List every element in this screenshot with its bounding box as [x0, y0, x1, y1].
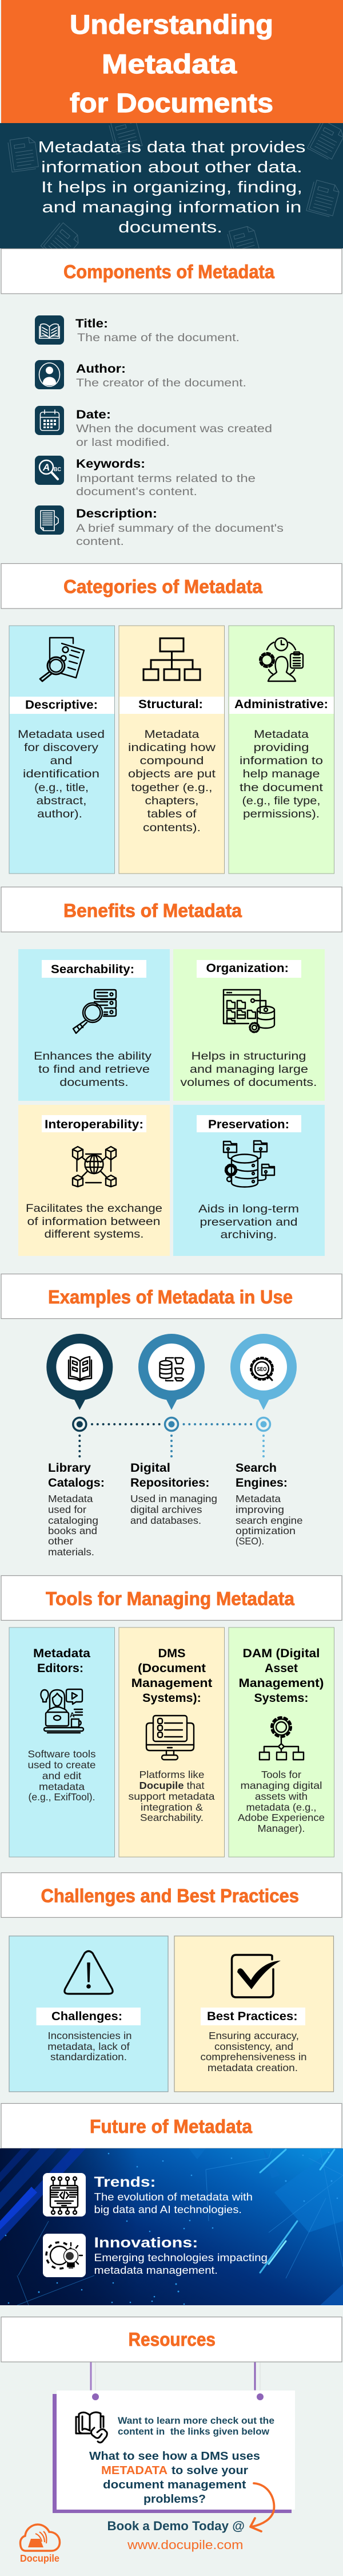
body text	[128, 728, 216, 834]
label	[197, 960, 301, 978]
text	[236, 1461, 303, 1547]
body text	[34, 1050, 151, 1089]
component: title: The name of the document.	[77, 331, 240, 344]
title banner: Understanding	[70, 9, 273, 39]
icon: network globe	[73, 1147, 116, 1187]
body text: (e.g., ExifTool).	[29, 1791, 95, 1803]
body text: Aids in long-term	[198, 1203, 299, 1215]
demo call to action: www.docupile.com	[127, 2538, 244, 2552]
body text: indicating how	[128, 741, 216, 754]
timeline node	[73, 1417, 160, 1457]
body text	[200, 2030, 306, 2073]
title banner: for Documents	[70, 88, 273, 118]
title banner	[1, 0, 343, 123]
call to action text: to solve your	[172, 2464, 248, 2477]
label: Interoperability:	[45, 1118, 143, 1131]
icon: hierarchy	[143, 638, 200, 680]
component: keywords: BC	[54, 467, 61, 473]
panel: resources card	[53, 2391, 295, 2513]
panel: future of metadata	[0, 2141, 343, 2305]
panel: structural	[119, 626, 224, 874]
panel: interoperability	[18, 1105, 170, 1256]
heading: categories of metadata: Categories of Metadata	[63, 576, 262, 598]
panel: descriptive	[9, 626, 114, 874]
body text: metadata creation.	[208, 2062, 298, 2073]
text	[130, 1461, 217, 1526]
body text	[27, 1748, 96, 1803]
body text: and edit	[42, 1770, 81, 1781]
body text: and managing large	[190, 1063, 308, 1076]
text: used for	[48, 1504, 86, 1515]
heading: challenges and best practices	[1, 1873, 342, 1918]
body text: Metadata	[144, 728, 200, 741]
body text: comprehensiveness in	[200, 2051, 306, 2063]
panel: administrative	[229, 626, 334, 874]
title: Systems:	[254, 1692, 309, 1705]
text: Repositories:	[130, 1476, 209, 1490]
body text: support metadata	[128, 1791, 215, 1802]
body text: of information between	[27, 1215, 160, 1228]
label	[42, 1115, 146, 1132]
text: materials.	[48, 1546, 94, 1558]
title: Management	[131, 1677, 212, 1690]
text: Search	[236, 1461, 277, 1475]
example: search engines	[230, 1334, 303, 1547]
component: title: Title:	[75, 317, 108, 330]
heading: components of metadata: Components of Metadata	[63, 262, 274, 283]
body text: Manager).	[257, 1823, 305, 1834]
heading: future of metadata	[1, 2103, 342, 2148]
title: Management)	[239, 1677, 324, 1690]
label band	[119, 697, 224, 714]
component: author: The creator of the document.	[76, 377, 246, 389]
technology background	[0, 2141, 343, 2305]
component: description: content.	[76, 535, 124, 548]
body text: Facilitates the exchange	[26, 1202, 162, 1215]
body text: identification	[23, 768, 99, 780]
panel: components list	[35, 315, 284, 548]
body text: volumes of documents.	[181, 1076, 317, 1089]
body text: the document	[240, 781, 324, 794]
body text: consistency, and	[214, 2041, 293, 2052]
component: title	[35, 315, 240, 345]
icon: gear hierarchy	[260, 1717, 304, 1760]
heading: tools for managing metadata	[1, 1575, 342, 1620]
body text: providing	[254, 741, 309, 754]
body text: tables of	[147, 808, 197, 820]
body text: Inconsistencies in	[48, 2030, 131, 2041]
body text: standardization.	[50, 2051, 127, 2063]
text: search engine	[236, 1515, 303, 1526]
label band: Administrative:	[234, 698, 328, 711]
heading: resources	[1, 2317, 342, 2362]
icon: admin person	[260, 638, 303, 681]
body text	[240, 728, 324, 820]
timeline node	[257, 1417, 270, 1457]
trend: icon and text	[43, 2173, 253, 2217]
body text: abstract,	[37, 795, 87, 807]
text: Engines:	[236, 1476, 288, 1490]
body text: different systems.	[45, 1228, 144, 1240]
body text: managing digital	[240, 1780, 322, 1791]
call to action text: document management	[103, 2478, 246, 2491]
body text	[26, 1202, 162, 1240]
component: keywords: document's content.	[76, 485, 197, 498]
body text: Metadata used	[18, 728, 105, 741]
text: and databases.	[130, 1515, 201, 1526]
arrow to demo link	[250, 2483, 274, 2531]
label: Best Practices:	[207, 2010, 297, 2023]
body text: Metadata	[254, 728, 309, 741]
example: library catalogs	[46, 1334, 160, 1558]
trend: icon and text: Trends:	[94, 2174, 155, 2190]
text: other	[48, 1535, 73, 1547]
icon: monitor checklist	[146, 1716, 194, 1760]
label band	[229, 697, 334, 714]
call to action text: What to see how a DMS uses	[89, 2449, 260, 2463]
body text: Adobe Experience	[238, 1812, 325, 1823]
timeline node	[165, 1417, 252, 1457]
text: optimization	[236, 1525, 296, 1536]
body text: documents.	[59, 1076, 129, 1089]
panel: best practices	[174, 1936, 334, 2092]
label: Preservation:	[208, 1118, 289, 1131]
body text: information to	[240, 754, 323, 767]
text: Metadata	[48, 1493, 93, 1504]
resource intro text: content in the links given below	[118, 2427, 269, 2437]
title: (Document	[138, 1662, 206, 1675]
title: DMS	[158, 1647, 185, 1660]
resource intro text	[118, 2416, 274, 2437]
call to action text: METADATA	[101, 2464, 167, 2477]
body text: metadata (e.g.,	[246, 1801, 317, 1813]
body text: objects are put	[128, 768, 216, 780]
panel: metadata editors	[9, 1627, 114, 1857]
title: Asset	[265, 1662, 298, 1675]
label: Organization:	[206, 962, 289, 975]
body text: Docupile that	[139, 1780, 205, 1791]
heading: resources: Resources	[128, 2329, 216, 2350]
intro panel	[0, 123, 343, 248]
example: digital repositories	[130, 1334, 252, 1526]
panel: searchability	[18, 949, 170, 1101]
demo call to action: Book a Demo Today @	[107, 2519, 245, 2533]
body text: integration &	[141, 1801, 203, 1813]
title: Editors:	[37, 1662, 83, 1675]
pin marker with book icon	[46, 1334, 113, 1410]
logo: docupile	[20, 2524, 59, 2564]
body text	[18, 728, 105, 820]
body text: (e.g., file type,	[242, 795, 320, 807]
text: Digital	[130, 1461, 170, 1475]
component: author	[35, 360, 246, 389]
demo call to action	[107, 2519, 245, 2552]
icon: document search	[40, 638, 84, 681]
body text: Ensuring accuracy,	[209, 2030, 299, 2041]
intro panel: documents.	[118, 218, 222, 236]
component: date: When the document was created	[76, 422, 272, 435]
body text: preservation and	[200, 1216, 297, 1228]
component: date: Date:	[76, 408, 111, 421]
heading: examples of metadata in use	[1, 1274, 342, 1319]
intro panel: and managing information in	[42, 198, 302, 216]
body text: permissions).	[243, 808, 320, 820]
text: books and	[48, 1525, 97, 1536]
label	[201, 2008, 305, 2025]
trend: icon and text: big data and AI technologies.	[94, 2203, 242, 2215]
body text: contents).	[143, 821, 201, 834]
innovation: icon and text	[43, 2234, 268, 2277]
call to action text	[89, 2449, 260, 2506]
body text: Tools for	[261, 1769, 301, 1780]
component: description	[35, 505, 284, 548]
innovation: icon and text: Innovations:	[94, 2235, 198, 2251]
heading: benefits of metadata	[1, 887, 342, 932]
icon: database archive	[224, 1141, 274, 1187]
panel: metadata editors: A	[70, 1711, 75, 1719]
component: author: Author:	[76, 362, 126, 376]
body text: chapters,	[145, 795, 199, 807]
body text: metadata	[39, 1781, 85, 1792]
card shadow frame	[53, 2394, 292, 2513]
title	[33, 1647, 90, 1675]
component: description: A brief summary of the document's	[76, 522, 284, 535]
body text	[198, 1203, 299, 1241]
panel: organization	[173, 949, 325, 1101]
text: cataloging	[48, 1515, 98, 1526]
component: date: or last modified.	[76, 436, 170, 449]
innovation: icon and text: Emerging technologies impacting	[94, 2251, 268, 2263]
body text: together (e.g.,	[131, 781, 213, 794]
heading: future of metadata: Future of Metadata	[90, 2116, 252, 2138]
text: improving	[236, 1504, 284, 1515]
icon: server search	[73, 990, 116, 1033]
text	[48, 1461, 105, 1558]
title: Metadata	[33, 1647, 90, 1660]
icon: book with link	[76, 2412, 107, 2443]
heading: tools for managing metadata: Tools for Managing Metadata	[46, 1589, 294, 1610]
icon: folder database	[224, 990, 274, 1032]
card pins	[92, 2393, 264, 2400]
call to action text: problems?	[143, 2492, 206, 2506]
heading: categories of metadata	[1, 563, 342, 609]
component: keywords: A	[42, 462, 50, 473]
body text: for discovery	[24, 741, 98, 754]
label band	[10, 697, 114, 714]
text: Library	[48, 1461, 91, 1475]
title: DAM (Digital	[242, 1647, 320, 1660]
body text: (e.g., title,	[34, 781, 89, 794]
component: date	[35, 406, 272, 449]
label: Challenges:	[51, 2010, 122, 2023]
panel: DMS	[119, 1627, 224, 1857]
body text: archiving.	[221, 1228, 277, 1241]
text: Metadata	[236, 1493, 281, 1504]
text: Used in managing	[130, 1493, 217, 1504]
intro panel: Metadata is data that provides	[38, 138, 305, 156]
component: description: Description:	[76, 507, 157, 520]
intro panel: information about other data.	[41, 158, 302, 176]
body text: Enhances the ability	[34, 1050, 151, 1062]
body text: metadata, lack of	[47, 2041, 130, 2052]
component: keywords: Important terms related to the	[76, 472, 256, 485]
label	[37, 2008, 141, 2025]
body text	[181, 1050, 317, 1089]
body text: Platforms like	[139, 1769, 205, 1780]
body text	[238, 1769, 325, 1834]
body text: assets with	[255, 1791, 308, 1802]
heading: challenges and best practices: Challenges and Best Practices	[41, 1886, 299, 1907]
body text: compound	[139, 754, 204, 767]
icon: warning triangle	[65, 1951, 113, 1994]
label	[197, 1115, 301, 1132]
body text	[128, 1769, 215, 1823]
body text: help manage	[242, 768, 320, 780]
pin marker with database icon	[138, 1334, 205, 1410]
heading: benefits of metadata: Benefits of Metadata	[63, 900, 242, 922]
body text	[47, 2030, 131, 2063]
pin marker with SEO icon: SEO	[257, 1366, 266, 1373]
title banner: Metadata	[102, 49, 237, 79]
body text: used to create	[27, 1759, 96, 1771]
label band: Structural:	[138, 698, 203, 711]
icon: checkbox	[232, 1955, 281, 1997]
innovation: icon and text: metadata management.	[94, 2264, 218, 2276]
title: Systems):	[142, 1692, 201, 1705]
trend: icon and text: The evolution of metadata with	[94, 2191, 253, 2203]
panel: preservation	[173, 1105, 325, 1256]
body text: to find and retrieve	[38, 1063, 150, 1076]
title	[239, 1647, 324, 1705]
body text: Software tools	[27, 1748, 96, 1760]
logo: docupile: Docupile	[20, 2553, 59, 2564]
body text: Searchability.	[140, 1812, 204, 1823]
panel: DAM	[229, 1627, 334, 1857]
panel: challenges	[9, 1936, 168, 2092]
heading: components of metadata	[1, 248, 342, 294]
title	[131, 1647, 212, 1705]
body text: Helps in structuring	[191, 1050, 306, 1062]
component: keywords: Keywords:	[76, 457, 145, 471]
body text: author).	[37, 808, 82, 820]
text: (SEO).	[236, 1535, 264, 1547]
text: digital archives	[130, 1504, 202, 1515]
pin marker with SEO icon	[230, 1334, 297, 1410]
resource intro text: Want to learn more check out the	[118, 2416, 274, 2426]
text: Catalogs:	[48, 1476, 105, 1490]
component: keywords	[35, 456, 256, 498]
icon: editor at laptop	[41, 1689, 83, 1733]
intro panel: It helps in organizing, finding,	[41, 178, 302, 196]
label: Searchability:	[51, 963, 134, 976]
label	[42, 960, 146, 978]
body text: and	[50, 754, 72, 767]
hanging strings	[90, 2362, 260, 2395]
label band: Descriptive:	[25, 698, 98, 712]
heading: examples of metadata in use: Examples of Metadata in Use	[48, 1287, 293, 1308]
